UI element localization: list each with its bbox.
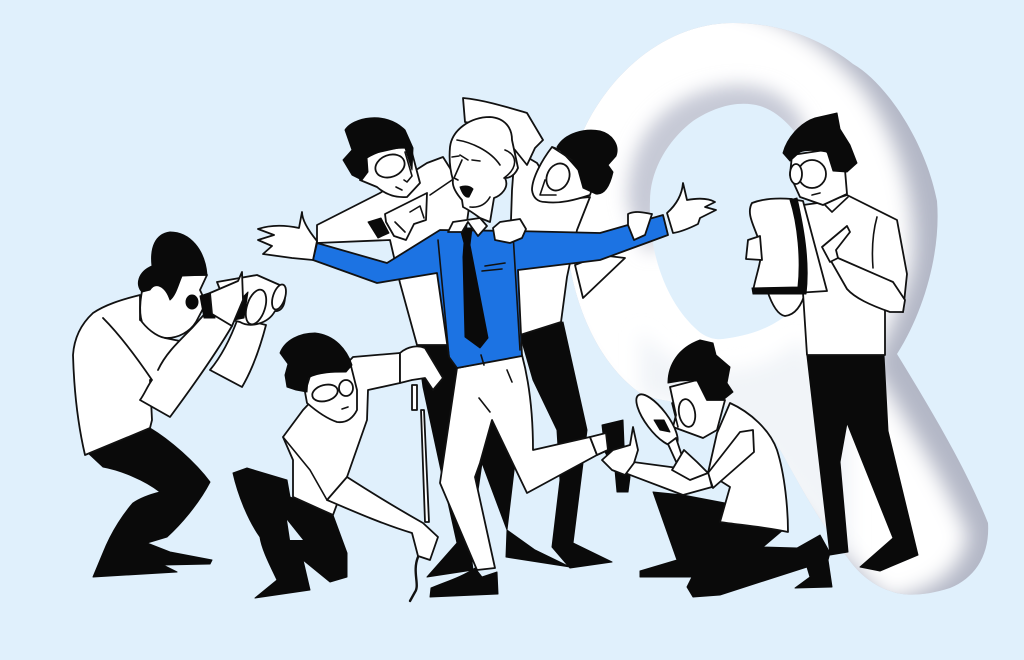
sleeve (708, 430, 754, 488)
glasses (310, 380, 353, 409)
left hand (746, 236, 762, 260)
hair (138, 232, 207, 300)
watch (368, 218, 389, 238)
trousers (640, 492, 832, 597)
back arm (210, 318, 266, 387)
eye and binocular barrel (186, 295, 198, 309)
trousers (520, 322, 612, 568)
hand (385, 193, 427, 240)
trousers (807, 355, 918, 571)
shoe (430, 568, 498, 597)
shirt detail (438, 233, 520, 365)
hair (557, 130, 617, 194)
figure: kneeling man with cane (233, 333, 443, 601)
glasses (372, 151, 412, 190)
head (360, 145, 420, 197)
hand holding magnifier (672, 450, 708, 480)
head (305, 362, 357, 422)
figure: left man with binoculars (73, 232, 289, 577)
shirt (510, 150, 590, 335)
trousers (440, 355, 597, 570)
lower arm (327, 477, 438, 560)
hair (783, 113, 857, 172)
icon: 3D magnifying glass (570, 23, 988, 595)
figure: back left man (317, 118, 570, 577)
shirt (283, 353, 400, 515)
front arm (103, 308, 232, 417)
figure: back right man (463, 98, 625, 568)
glasses (790, 160, 826, 195)
far sleeve (575, 255, 625, 298)
shirt (708, 403, 788, 532)
right hand (667, 183, 716, 233)
magnifier lens opening (650, 104, 821, 339)
shirt (317, 157, 470, 345)
head (670, 380, 725, 438)
arm (823, 247, 905, 312)
face (460, 186, 473, 197)
hair (343, 118, 413, 180)
collar (825, 197, 848, 212)
trousers (233, 468, 347, 598)
blue shirt and arms (313, 215, 668, 368)
notepad (750, 198, 827, 294)
hair (668, 340, 733, 400)
shirt (803, 195, 907, 355)
head (450, 117, 518, 222)
hand on right shoulder (493, 219, 526, 243)
knee gap (287, 520, 303, 540)
tape (410, 557, 418, 601)
pen hand (822, 226, 850, 262)
glasses (540, 147, 574, 195)
head (532, 147, 600, 203)
trouser cuff (590, 433, 608, 455)
sleeve edge (283, 437, 327, 500)
binoculars (217, 275, 289, 327)
shirt (73, 295, 200, 455)
collar (448, 218, 487, 236)
head (140, 275, 207, 338)
head (790, 150, 847, 205)
raised foot (602, 420, 630, 492)
hand on cane (400, 346, 443, 390)
tie (460, 228, 488, 348)
left hand (258, 212, 317, 260)
figure: center man in blue shirt (258, 117, 716, 597)
cane (412, 385, 429, 522)
figure: right man with notepad (746, 113, 918, 571)
hand (602, 427, 638, 475)
hair line and curls (457, 140, 515, 178)
magnifying glass (630, 389, 684, 466)
elbow (767, 290, 806, 316)
raised arm (463, 98, 543, 165)
trousers (417, 340, 570, 577)
arm (617, 462, 712, 495)
figure: kneeling man with magnifier (602, 340, 832, 597)
hand on right arm (628, 212, 652, 240)
hair (280, 333, 352, 392)
hand (210, 272, 243, 326)
glasses (672, 398, 697, 428)
trousers (88, 428, 212, 577)
crease lines (479, 370, 512, 412)
